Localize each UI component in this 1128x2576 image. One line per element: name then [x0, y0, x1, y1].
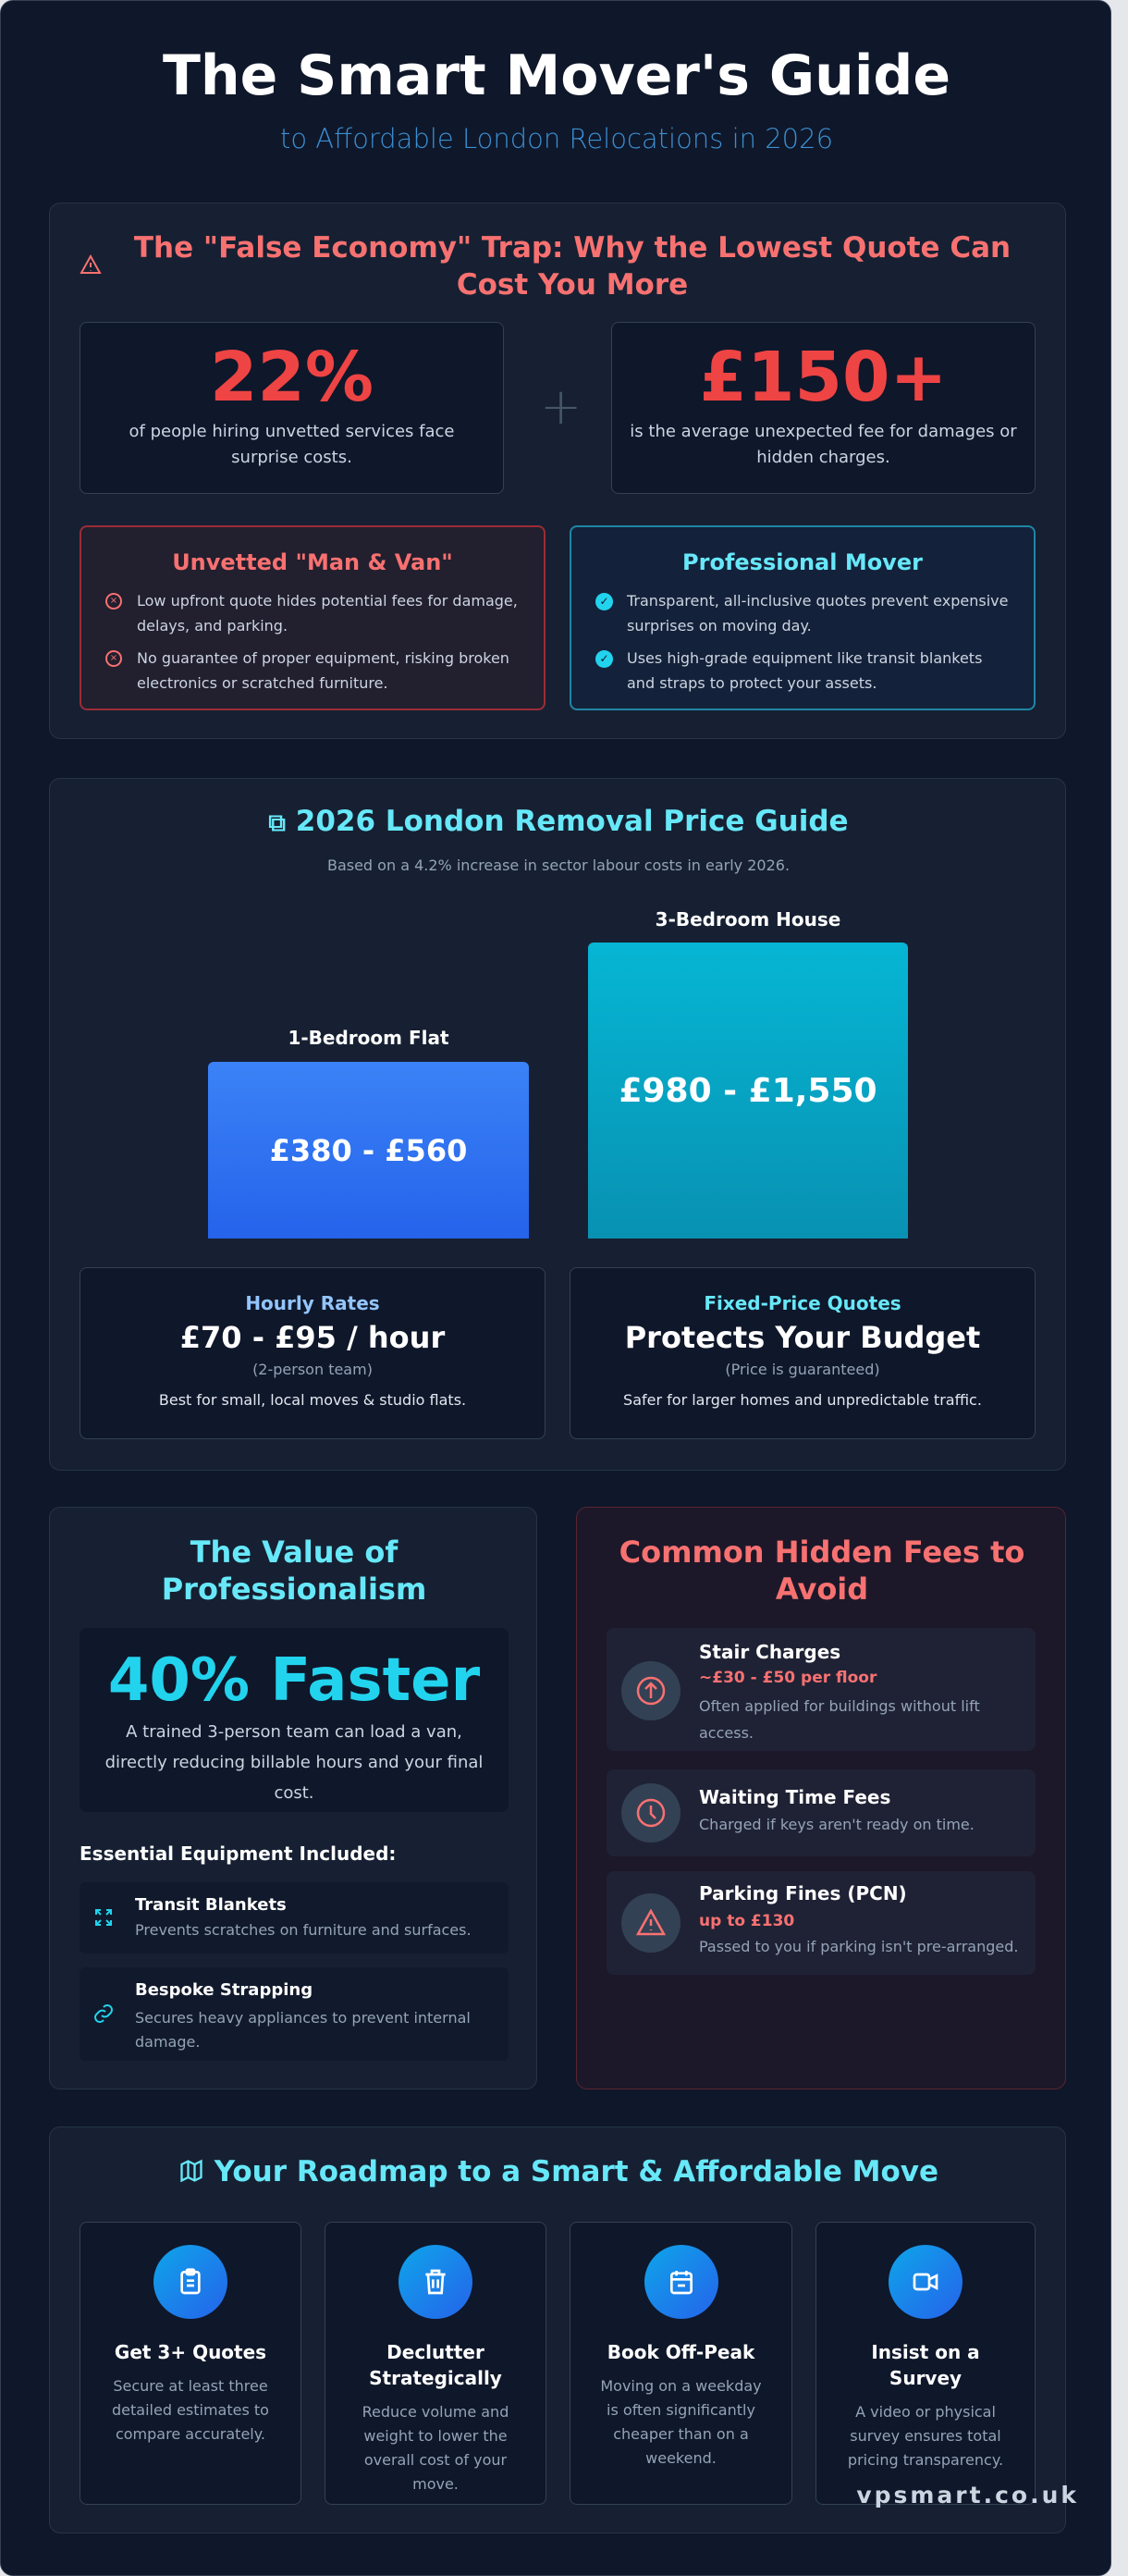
step: declutter: Declutter [386, 2341, 484, 2363]
stat: 22%: 22% [210, 338, 374, 417]
stat: 40% faster [80, 1628, 509, 1812]
item: bespoke strapping: Bespoke Strapping [135, 1980, 313, 2000]
icon: video [889, 2245, 962, 2319]
icon: link [94, 2004, 113, 2023]
stat: 22%: of people hiring unvetted services face surprise costs. [129, 422, 454, 467]
compare: man & van: × [110, 596, 117, 606]
bar: 3-bedroom: 3-Bedroom House [656, 908, 840, 931]
icon: clipboard [153, 2245, 227, 2319]
subheading: Essential Equipment Included: [80, 1843, 396, 1865]
step: get quotes: Secure at least three detailed estimates to compare accurately. [112, 2377, 269, 2443]
step: declutter: Strategically [369, 2367, 502, 2389]
step: off-peak: Moving on a weekday is often significantly cheaper than on a weekend. [600, 2377, 762, 2467]
step: survey [815, 2222, 1036, 2505]
fee: parking fines: Passed to you if parking isn't pre-arranged. [699, 1938, 1018, 1955]
heading [619, 1535, 1024, 1607]
icon: expand [95, 1909, 112, 1926]
fee: waiting time: Charged if keys aren't ready on time. [699, 1816, 975, 1833]
fee: stair charges [607, 1628, 1036, 1751]
heading: Professionalism [162, 1571, 426, 1607]
stat: 40% faster: A trained 3-person team can load a van, directly reducing billable hours and your final cost. [105, 1722, 483, 1803]
compare: man & van: Unvetted "Man & Van" [172, 549, 453, 575]
step: survey: Insist on a [871, 2341, 980, 2363]
panel: price guide [49, 778, 1066, 1471]
bar: 3-bedroom: £980 - £1,550 [619, 1071, 877, 1110]
stat: 22% [80, 322, 504, 494]
info: hourly: £70 - £95 / hour [180, 1320, 445, 1355]
bar: 1-bedroom: £380 - £560 [270, 1132, 467, 1167]
title: The Smart Mover's Guide [163, 43, 950, 108]
compare: professional: ✓ [599, 652, 609, 665]
step: survey: Survey [889, 2367, 962, 2389]
heading: Common Hidden Fees to [619, 1535, 1024, 1570]
compare: professional [570, 525, 1036, 710]
compare: professional: ✓ [599, 595, 609, 608]
icon: plus: + [540, 377, 582, 436]
step: off-peak: Book Off-Peak [607, 2341, 754, 2363]
info: fixed price [570, 1267, 1036, 1439]
info: hourly: (2-person team) [252, 1361, 373, 1378]
item: transit blankets: Prevents scratches on furniture and surfaces. [135, 1921, 472, 1939]
icon: warning [621, 1893, 680, 1953]
heading: Your Roadmap to a Smart & Affordable Move [215, 2155, 938, 2188]
step: survey: A video or physical survey ensures total pricing transparency. [848, 2403, 1003, 2469]
bar: 1-bedroom: 1-Bedroom Flat [288, 1027, 449, 1049]
fee: parking fines: up to £130 [699, 1912, 794, 1930]
fee: stair charges: Often applied for buildings without lift access. [699, 1697, 980, 1742]
item: transit blankets: Transit Blankets [135, 1895, 287, 1915]
step: get quotes: Get 3+ Quotes [115, 2341, 266, 2363]
stat: £150+: is the average unexpected fee for damages or hidden charges. [630, 422, 1017, 467]
stat: £150+ [611, 322, 1036, 494]
compare: man & van: × [110, 653, 117, 663]
bar: 1-bedroom [208, 1027, 529, 1239]
compare: professional: Professional Mover [682, 549, 923, 575]
subtitle: Based on a 4.2% increase in sector labour costs in early 2026. [327, 857, 790, 874]
info: fixed price: Protects Your Budget [625, 1320, 980, 1355]
info: hourly: Hourly Rates [245, 1292, 380, 1314]
heading: ⧉ 2026 London Removal Price Guide [268, 805, 849, 838]
fee: parking fines [607, 1871, 1036, 1975]
item: transit blankets [80, 1882, 509, 1954]
compare: man & van: Low upfront quote hides potential fees for damage, delays, and parking. [137, 592, 518, 635]
heading: Avoid [776, 1571, 868, 1607]
icon: trash [398, 2245, 472, 2319]
fee: waiting time [607, 1769, 1036, 1856]
panel: value of professionalism [49, 1507, 537, 2089]
bar: 3-bedroom [588, 908, 908, 1239]
icon: warning [80, 254, 102, 274]
compare: man & van [80, 525, 546, 710]
step: off-peak [570, 2222, 792, 2505]
compare: professional: Transparent, all-inclusive quotes prevent expensive surprises on moving day. [627, 592, 1008, 635]
compare: man & van: No guarantee of proper equipment, risking broken electronics or scratched furniture. [137, 649, 509, 692]
subtitle: to Affordable London Relocations in 2026 [280, 123, 833, 154]
footer: brand: vpsmart.co.uk [856, 2482, 1079, 2508]
info: fixed price: Safer for larger homes and unpredictable traffic. [623, 1391, 982, 1409]
stat: £150+: £150+ [700, 338, 947, 417]
heading: The Value of [190, 1535, 398, 1570]
info: fixed price: (Price is guaranteed) [725, 1361, 880, 1378]
info: hourly [80, 1267, 546, 1439]
info: hourly: Best for small, local moves & studio flats. [159, 1391, 466, 1409]
fee: parking fines: Parking Fines (PCN) [699, 1882, 907, 1904]
item: bespoke strapping [80, 1967, 509, 2061]
icon: arrow up [621, 1661, 680, 1720]
panel: roadmap [49, 2126, 1066, 2533]
icon: calendar [644, 2245, 717, 2319]
fee: stair charges: Stair Charges [699, 1641, 840, 1663]
item: bespoke strapping: Secures heavy appliances to prevent internal damage. [135, 2009, 471, 2051]
heading [162, 1535, 426, 1607]
step: get quotes [80, 2222, 301, 2505]
icon: clock [621, 1783, 680, 1843]
fee: stair charges: ~£30 - £50 per floor [699, 1669, 877, 1687]
panel: hidden fees [576, 1507, 1066, 2089]
info: fixed price: Fixed-Price Quotes [704, 1292, 901, 1314]
stat: 40% faster: 40% Faster [108, 1646, 480, 1715]
panel: false economy [49, 203, 1066, 739]
compare: professional: Uses high-grade equipment like transit blankets and straps to protect your assets. [627, 649, 982, 692]
step: declutter: Reduce volume and weight to lower the overall cost of your move. [362, 2403, 509, 2493]
fee: waiting time: Waiting Time Fees [699, 1786, 890, 1808]
heading: The "False Economy" Trap: Why the Lowest Quote Can Cost You More [134, 231, 1011, 302]
step: declutter [325, 2222, 546, 2505]
